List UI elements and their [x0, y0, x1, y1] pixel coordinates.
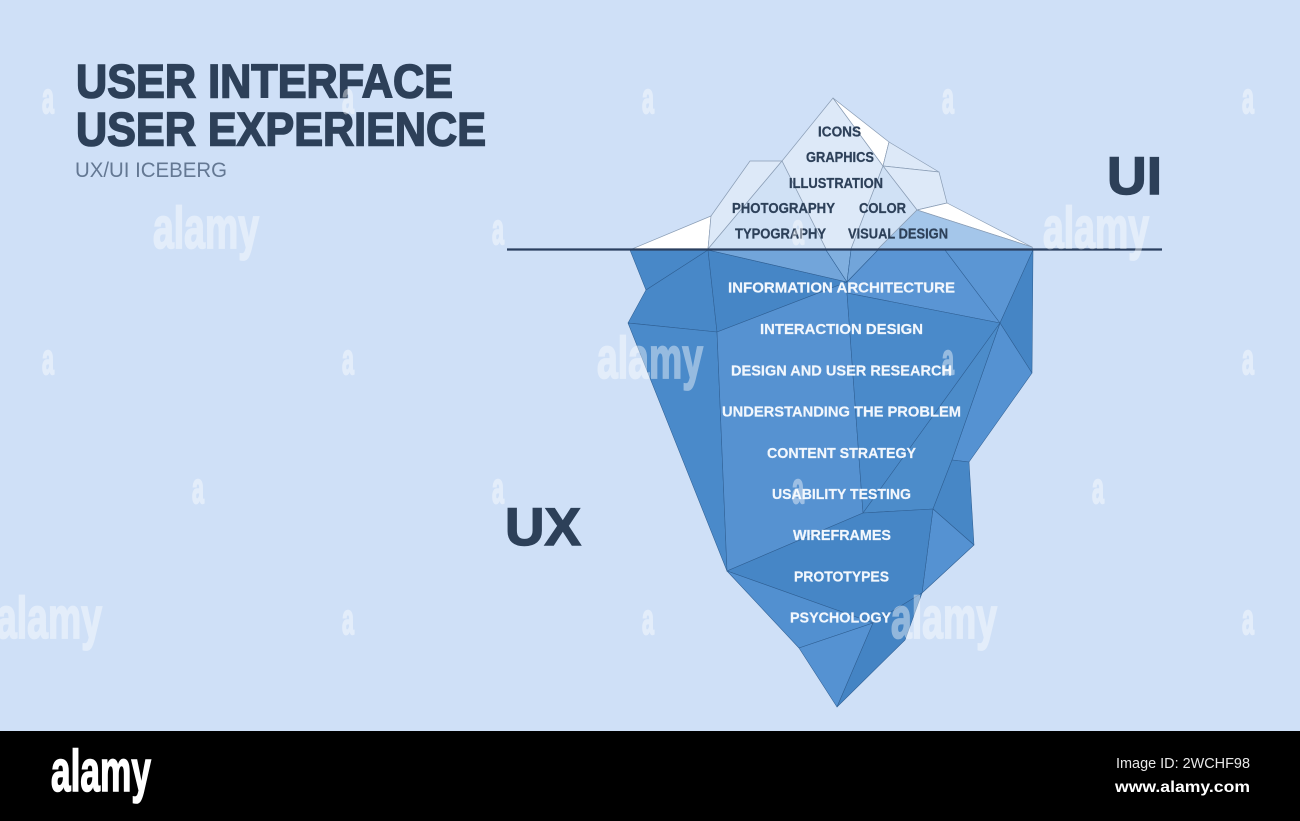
title	[76, 54, 486, 156]
UX labels: INTERACTION DESIGN	[760, 321, 923, 338]
UI labels	[732, 124, 948, 242]
UI labels: ICONS	[818, 124, 861, 140]
waterline	[507, 248, 1162, 251]
watermarks: a	[42, 74, 54, 123]
subtitle: UX/UI ICEBERG	[75, 159, 227, 182]
watermarks: a	[1242, 335, 1254, 384]
UI labels: GRAPHICS	[806, 150, 874, 166]
UX labels: INFORMATION ARCHITECTURE	[728, 280, 955, 297]
footer bar: www.alamy.com	[1114, 779, 1250, 796]
watermarks: a	[942, 335, 954, 384]
UI labels: ILLUSTRATION	[789, 176, 883, 192]
watermarks: a	[642, 74, 654, 123]
UI heading: UI	[1107, 147, 1162, 206]
watermarks: a	[1242, 595, 1254, 644]
watermarks: a	[942, 74, 954, 123]
UX labels: CONTENT STRATEGY	[767, 445, 916, 462]
watermarks: alamy	[1043, 196, 1149, 261]
watermarks: a	[492, 205, 504, 254]
UX labels: UNDERSTANDING THE PROBLEM	[722, 404, 961, 420]
watermarks: alamy	[891, 586, 997, 651]
title: USER EXPERIENCE	[76, 102, 486, 156]
iceberg above water: UI	[632, 98, 1033, 249]
UX labels: WIREFRAMES	[793, 527, 891, 544]
iceberg below water: UX	[628, 250, 1033, 707]
watermarks: a	[792, 464, 804, 513]
watermarks: a	[1242, 74, 1254, 123]
watermarks: a	[342, 335, 354, 384]
watermarks: alamy	[153, 196, 259, 261]
UX labels	[722, 280, 961, 627]
UX labels: PSYCHOLOGY	[790, 610, 891, 627]
UI labels: TYPOGRAPHY	[735, 226, 826, 242]
watermarks: a	[642, 595, 654, 644]
watermarks	[0, 74, 1254, 651]
watermarks: a	[1092, 464, 1104, 513]
UX labels: DESIGN AND USER RESEARCH	[731, 362, 952, 379]
watermarks: a	[42, 335, 54, 384]
UX heading: UX	[505, 498, 581, 557]
watermarks: alamy	[0, 586, 102, 651]
footer bar	[0, 731, 1300, 821]
watermarks: a	[492, 464, 504, 513]
watermarks: a	[192, 464, 204, 513]
UI labels: PHOTOGRAPHY	[732, 201, 835, 217]
UX labels: USABILITY TESTING	[772, 486, 911, 503]
watermarks: alamy	[597, 326, 703, 391]
watermarks: a	[792, 205, 804, 254]
watermarks: a	[342, 74, 354, 123]
title: USER INTERFACE	[76, 54, 453, 108]
footer bar: Image ID: 2WCHF98	[1116, 755, 1250, 772]
UI labels: VISUAL DESIGN	[848, 226, 948, 242]
UX labels: PROTOTYPES	[794, 568, 889, 585]
watermarks: a	[342, 595, 354, 644]
UI labels: COLOR	[859, 201, 906, 217]
footer bar: alamy	[51, 739, 151, 804]
